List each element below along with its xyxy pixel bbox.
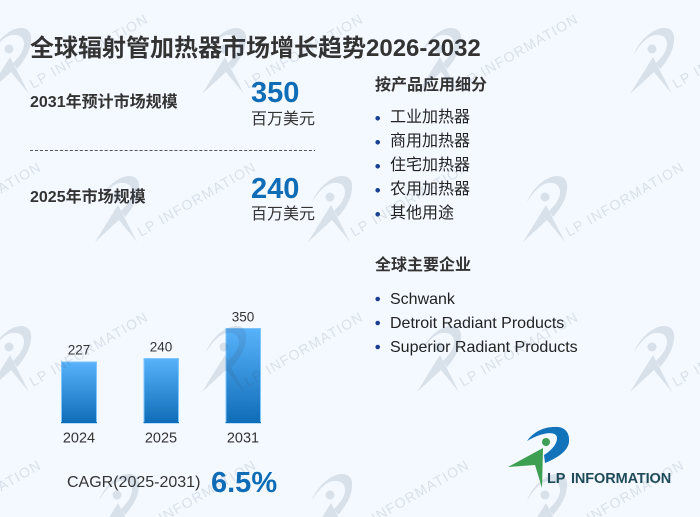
title: 全球辐射管加热器市场增长趋势2026-2032 xyxy=(30,35,481,62)
panel: product application segments: 住宅加热器 xyxy=(390,156,470,174)
bar chart: 2025 xyxy=(145,430,177,446)
stat: 2025 market size: 240 xyxy=(251,173,299,205)
stat: 2025 market size xyxy=(30,173,315,223)
watermark layer: LP INFORMATION xyxy=(348,158,472,240)
watermark layer: LP INFORMATION xyxy=(26,10,151,92)
bar chart xyxy=(61,310,261,446)
bar chart: 2031 xyxy=(227,430,259,446)
CAGR callout: 6.5% xyxy=(211,467,277,499)
panel: major companies xyxy=(375,255,578,356)
logo: LP Information xyxy=(508,427,671,488)
panel: major companies: Superior Radiant Products xyxy=(390,339,578,356)
stat: 2031 market size: 百万美元 xyxy=(251,110,315,128)
CAGR callout xyxy=(67,467,277,499)
bar chart: 240 xyxy=(150,340,172,354)
stat: 2031 market size xyxy=(30,77,315,128)
stat: 2025 market size: 百万美元 xyxy=(251,205,315,223)
bar chart: 2024 xyxy=(63,430,95,446)
watermark layer: LP INFORMATION xyxy=(562,158,687,240)
watermark layer: LP INFORMATION xyxy=(242,10,366,92)
watermark layer: LP INFORMATION xyxy=(456,308,581,390)
bar chart: 350 xyxy=(232,310,254,324)
stat: 2031 market size: 2031年预计市场规模 xyxy=(30,92,178,111)
bar chart: 227 xyxy=(68,342,90,358)
panel: product application segments: 工业加热器 xyxy=(390,108,470,126)
watermark layer: LP INFORMATION xyxy=(26,308,151,390)
stat: 2031 market size: 350 xyxy=(251,77,299,109)
CAGR callout: CAGR(2025-2031) xyxy=(67,474,200,491)
watermark layer: LP INFORMATION xyxy=(456,10,581,92)
watermark layer: LP INFORMATION xyxy=(134,158,259,240)
panel: product application segments: 其他用途 xyxy=(390,204,454,222)
panel: product application segments: 商用加热器 xyxy=(390,132,470,150)
panel: product application segments: 按产品应用细分 xyxy=(375,75,487,94)
panel: product application segments xyxy=(375,75,487,222)
panel: product application segments: 农用加热器 xyxy=(390,180,470,198)
panel: major companies: 全球主要企业 xyxy=(375,255,471,274)
panel: major companies: Schwank xyxy=(390,291,456,308)
watermark layer: LP INFORMATION xyxy=(242,308,366,390)
panel: major companies: Detroit Radiant Products xyxy=(390,315,564,332)
stat: 2025 market size: 2025年市场规模 xyxy=(30,187,146,206)
logo: LP Information: LP INFORMATION xyxy=(547,471,671,487)
